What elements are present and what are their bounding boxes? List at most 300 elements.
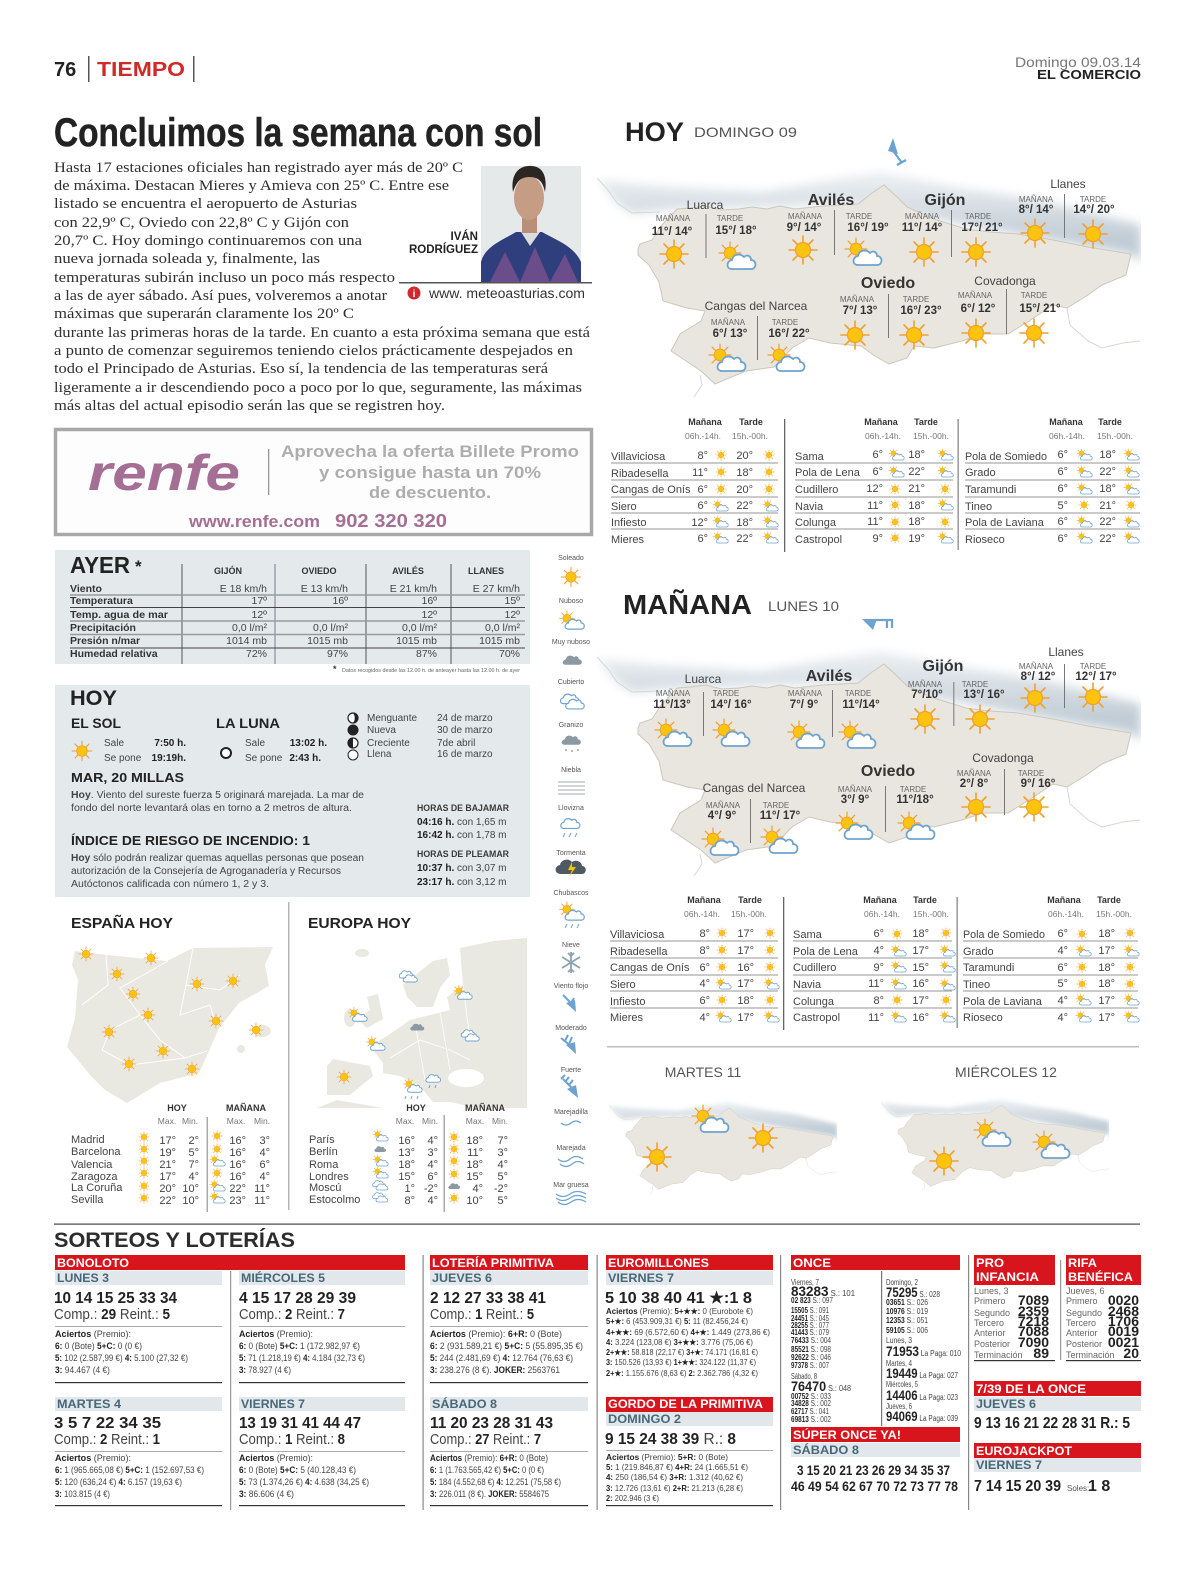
table: today forecast column 1: 6° bbox=[697, 484, 708, 496]
map: martes 11 bbox=[609, 1064, 837, 1195]
icon: wind arrow today bbox=[888, 138, 906, 165]
panel: ayer: 12º bbox=[421, 609, 437, 621]
table: today forecast column 3: 6° bbox=[1057, 483, 1068, 495]
draw: jueves 6: 2 12 27 33 38 41 bbox=[430, 1290, 546, 1307]
weather legend: Nieve bbox=[562, 942, 580, 949]
el sol bbox=[71, 716, 186, 764]
panel: ayer: 1015 mb bbox=[396, 635, 437, 647]
title: Concluimos la semana con sol bbox=[54, 111, 542, 155]
article text: a punto de comenzar seguiremos teniendo cielos prácticamente despejados en bbox=[54, 343, 574, 359]
footnote bbox=[333, 664, 520, 674]
forecast: oviedo: Oviedo bbox=[861, 763, 915, 780]
table: tomorrow forecast column 3: Pola de Laviana bbox=[963, 996, 1043, 1008]
draw: martes 4: Aciertos (Premio): bbox=[55, 1453, 131, 1463]
table: tomorrow forecast column 2: 17° bbox=[912, 995, 929, 1007]
table: tomorrow forecast column 1: 06h.-14h. bbox=[684, 909, 720, 919]
advert: renfe: Aprovecha la oferta Billete Promo bbox=[281, 442, 579, 461]
panel: ayer: E 13 km/h bbox=[301, 583, 348, 595]
panel: ayer: Presión n/mar bbox=[70, 635, 140, 647]
table: today forecast column 1 bbox=[611, 417, 778, 546]
once results, right column: 12353 S.: 051 bbox=[886, 1316, 928, 1325]
forecast: aviles: 9°/ 14° bbox=[787, 222, 822, 234]
weather legend: Viento flojo bbox=[554, 983, 588, 990]
panel: ayer: LLANES bbox=[468, 566, 504, 576]
moon phases: Menguante bbox=[367, 713, 417, 724]
forecast: cangas del narcea: Cangas del Narcea bbox=[705, 299, 808, 313]
table: tomorrow forecast column 1: 17° bbox=[737, 978, 754, 990]
page header: TIEMPO bbox=[97, 59, 185, 81]
panel: super once ya: 3 15 20 21 23 26 29 34 35 37 bbox=[797, 1462, 950, 1478]
table: tomorrow forecast column 3: Tineo bbox=[963, 979, 990, 991]
once results, left column: 41443 S.: 079 bbox=[791, 1328, 829, 1337]
table: tomorrow forecast column 1: 15h.-00h. bbox=[731, 909, 767, 919]
weather legend: Tormenta bbox=[556, 850, 586, 857]
panel: ayer: 87% bbox=[416, 648, 437, 660]
weather legend: Muy nuboso bbox=[552, 639, 590, 646]
panel: euromillones: 4+★★: 69 (6.572,60 €) 4+★: 1.449 (273,86 €) bbox=[606, 1328, 770, 1337]
once results, right column: 94069 La Paga: 039 bbox=[886, 1408, 958, 1424]
forecast: gijon: Gijón bbox=[923, 658, 963, 675]
once results, right column: 14406 La Paga: 023 bbox=[886, 1387, 958, 1403]
table: europe: 13° bbox=[398, 1147, 415, 1159]
heading: mañana lunes bbox=[623, 589, 839, 620]
table: spain: Zaragoza bbox=[71, 1171, 118, 1183]
table: today forecast column 3: Mañana bbox=[1049, 417, 1084, 427]
forecast: covadonga bbox=[957, 751, 1056, 821]
panel: bonoloto bbox=[54, 1255, 405, 1510]
table: spain: La Coruña bbox=[71, 1182, 123, 1194]
map: spain bbox=[67, 947, 273, 1103]
once results, left column: 85521 S.: 098 bbox=[791, 1345, 831, 1354]
table: today forecast column 2: 9° bbox=[872, 533, 883, 545]
draw: martes 4 bbox=[54, 1397, 222, 1506]
article text: listado se encuentra el aeropuerto de Asturias bbox=[54, 196, 357, 212]
table: tomorrow forecast column 2: 6° bbox=[873, 928, 884, 940]
draw: lunes 3: 5: 102 (2.587,99 €) 4: 5.100 (27,32 €) bbox=[55, 1353, 188, 1363]
weather legend bbox=[552, 555, 590, 1204]
draw: sabado 8: SÁBADO 8 bbox=[432, 1396, 497, 1411]
article text: de máxima. Destacan Mieres y Amieva con 25º C. Entre ese bbox=[54, 178, 449, 194]
article text: durante las primeras horas de la tarde. En cuanto a esta próxima semana que está bbox=[54, 325, 591, 341]
forecast: covadonga: Covadonga bbox=[974, 274, 1036, 288]
forecast: oviedo: MAÑANA bbox=[840, 295, 875, 304]
forecast: gijon: 17°/ 21° bbox=[961, 222, 1003, 234]
panel: ayer: 16º bbox=[332, 595, 348, 607]
table: europe: 18° bbox=[398, 1159, 415, 1171]
table: today forecast column 1: Ribadesella bbox=[611, 468, 669, 480]
panel: gordo de la primitiva: DOMINGO 2 bbox=[608, 1412, 681, 1426]
table: tomorrow forecast column 2: 4° bbox=[873, 945, 884, 957]
la luna: Se pone bbox=[245, 753, 283, 764]
author byline and photo: www. meteoasturias.com bbox=[428, 286, 585, 301]
panel: euromillones: 3: 150.526 (13,93 €) 1+★★: 324.122 (11,37 €) bbox=[606, 1358, 756, 1367]
panel: loteria primitiva: LOTERÍA PRIMITIVA bbox=[432, 1255, 554, 1270]
forecast: aviles: 11°/14° bbox=[842, 699, 880, 711]
panel: gordo de la primitiva bbox=[605, 1397, 773, 1506]
table: tomorrow forecast column 2: Colunga bbox=[793, 996, 835, 1008]
panel: gordo de la primitiva: 3: 12.726 (13,61 €) 2+R: 21.213 (6,28 €) bbox=[606, 1484, 743, 1493]
article text bbox=[54, 160, 591, 414]
panel: rifa benefica: 0020 bbox=[1108, 1292, 1139, 1308]
article text: máximas que superarán claramente los 20º C bbox=[54, 306, 354, 322]
footnote: Datos recogidos desde las 12.00 h. de anteayer hasta las 12.00 h. de ayer bbox=[342, 668, 520, 674]
table: tomorrow forecast column 2: 18° bbox=[912, 928, 929, 940]
el sol: EL SOL bbox=[71, 716, 121, 731]
panel: rifa benefica: 20 bbox=[1123, 1345, 1139, 1361]
draw: viernes 7: Comp.: 1 Reint.: 8 bbox=[239, 1431, 345, 1448]
moon phases bbox=[348, 713, 493, 760]
page header: EL COMERCIO bbox=[1037, 68, 1141, 82]
forecast: covadonga: Covadonga bbox=[972, 751, 1034, 765]
table: today forecast column 1: Villaviciosa bbox=[611, 451, 666, 463]
draw: martes 4: MARTES 4 bbox=[57, 1397, 121, 1411]
horas de marea: 04:16 h. con 1,65 m bbox=[417, 817, 507, 828]
panel: gordo de la primitiva: 2: 202.946 (3 €) bbox=[606, 1494, 659, 1503]
table: tomorrow forecast column 3: Taramundi bbox=[963, 962, 1014, 974]
table: today forecast column 2: 12° bbox=[866, 483, 883, 495]
el sol: Se pone bbox=[104, 753, 142, 764]
horas de marea: HORAS DE PLEAMAR bbox=[417, 849, 509, 859]
table: europe: Moscú bbox=[309, 1182, 341, 1194]
draw: jueves 6: 5: 244 (2.481,69 €) 4: 12.764 (76,63 €) bbox=[430, 1353, 573, 1363]
forecast: luarca: TARDE bbox=[717, 214, 743, 223]
table: today forecast column 1: Tarde bbox=[739, 417, 763, 427]
table: tomorrow forecast column 3: 15h.-00h. bbox=[1096, 909, 1132, 919]
table: europe: 10° bbox=[466, 1195, 483, 1207]
table: spain: 4° bbox=[188, 1171, 199, 1183]
table: tomorrow forecast column 2: 11° bbox=[868, 1012, 884, 1024]
horas de marea: 16:42 h. con 1,78 m bbox=[417, 830, 507, 841]
table: tomorrow forecast column 1: 16° bbox=[737, 962, 754, 974]
table: spain: 2° bbox=[188, 1135, 199, 1147]
table: today forecast column 1: Mieres bbox=[611, 534, 645, 546]
panel: once bbox=[791, 1255, 961, 1426]
forecast: luarca: 15°/ 18° bbox=[715, 225, 757, 237]
table: europe: 3° bbox=[427, 1147, 438, 1159]
table: spain: HOY bbox=[167, 1103, 187, 1113]
once results, right column: Martes, 4 bbox=[886, 1359, 912, 1368]
forecast: cangas del narcea: TARDE bbox=[763, 801, 789, 810]
weather legend: Niebla bbox=[561, 767, 581, 774]
indice de riesgo de incendio bbox=[71, 833, 364, 890]
article text: con 22,9º C, Oviedo con 22,8º C y Gijón con bbox=[54, 215, 350, 231]
draw: sabado 8 bbox=[430, 1396, 588, 1506]
draw: jueves 6: JUEVES 6 bbox=[432, 1271, 492, 1285]
panel: pro infancia: Lunes, 3 bbox=[974, 1286, 1009, 1296]
horas de marea: 10:37 h. con 3,07 m bbox=[417, 863, 507, 874]
panel: super once ya bbox=[791, 1427, 960, 1494]
panel: rifa benefica: Anterior bbox=[1066, 1328, 1098, 1338]
panel: ayer: 12º bbox=[251, 609, 267, 621]
panel: ayer: Temperatura bbox=[70, 595, 133, 607]
heading: hoy domingo bbox=[625, 117, 797, 147]
table: tomorrow forecast column 3: 06h.-14h. bbox=[1048, 909, 1084, 919]
once results, left column: 15505 S.: 091 bbox=[791, 1306, 829, 1315]
panel: loteria primitiva bbox=[430, 1255, 588, 1506]
table: europe: Min. bbox=[422, 1116, 438, 1126]
table: today forecast column 3: 22° bbox=[1099, 516, 1116, 528]
panel: ayer: E 27 km/h bbox=[473, 583, 520, 595]
table: today forecast column 3: 15h.-00h. bbox=[1097, 431, 1133, 441]
table: europe: 18° bbox=[466, 1159, 483, 1171]
table: tomorrow forecast column 2: Castropol bbox=[793, 1012, 840, 1024]
forecast: luarca: Luarca bbox=[687, 198, 724, 212]
table: today forecast column 1: 22° bbox=[736, 533, 753, 545]
panel: rifa benefica: 0021 bbox=[1108, 1334, 1139, 1350]
panel: pro infancia: 7088 bbox=[1018, 1323, 1049, 1339]
moon phases: 24 de marzo bbox=[437, 713, 493, 724]
advert: renfe: 902 320 320 bbox=[335, 511, 447, 531]
table: tomorrow forecast column 3: 17° bbox=[1098, 945, 1115, 957]
table: today forecast column 1: Cangas de Onís bbox=[611, 484, 691, 496]
table: europe: Roma bbox=[309, 1159, 339, 1171]
table: europe: Max. bbox=[466, 1116, 484, 1126]
draw: martes 4: 3: 103.815 (4 €) bbox=[55, 1489, 110, 1499]
table: today forecast column 1: 22° bbox=[736, 500, 753, 512]
forecast: luarca: 11°/ 14° bbox=[652, 226, 693, 238]
table: europe: MAÑANA bbox=[465, 1103, 505, 1113]
forecast: oviedo: 3°/ 9° bbox=[841, 794, 870, 806]
footnote: * bbox=[333, 664, 337, 674]
draw: lunes 3 bbox=[54, 1271, 222, 1383]
forecast: cangas del narcea: 6°/ 13° bbox=[713, 328, 748, 340]
table: today forecast column 3: 6° bbox=[1057, 449, 1068, 461]
panel: ayer bbox=[55, 550, 530, 664]
table: today forecast column 2: Navia bbox=[795, 501, 824, 513]
table: tomorrow forecast column 1: Tarde bbox=[738, 895, 762, 905]
table: today forecast column 3: 18° bbox=[1099, 449, 1116, 461]
table: today forecast column 1: 20° bbox=[736, 484, 753, 496]
forecast: oviedo: MAÑANA bbox=[838, 785, 873, 794]
table: today forecast column 2: Colunga bbox=[795, 517, 837, 529]
table: tomorrow forecast column 3: Tarde bbox=[1097, 895, 1121, 905]
moon phases: 30 de marzo bbox=[437, 725, 493, 736]
table: tomorrow forecast column 3: Grado bbox=[963, 946, 994, 958]
forecast: covadonga: TARDE bbox=[1021, 291, 1047, 300]
panel: 7/39 de la once: 7/39 DE LA ONCE bbox=[976, 1382, 1086, 1396]
panel: bonoloto: BONOLOTO bbox=[57, 1256, 129, 1270]
forecast: cangas del narcea: TARDE bbox=[772, 318, 798, 327]
panel: pro infancia: 7090 bbox=[1018, 1334, 1049, 1350]
draw: sabado 8: Aciertos (Premio): 6+R: 0 (Bote) bbox=[430, 1453, 548, 1463]
table: today forecast column 1: Infiesto bbox=[611, 517, 646, 529]
table: tomorrow forecast column 2: 11° bbox=[868, 978, 884, 990]
mar, 20 millas: MAR, 20 MILLAS bbox=[71, 770, 184, 785]
panel: ayer: 16º bbox=[421, 595, 437, 607]
table: europe: 4° bbox=[497, 1159, 508, 1171]
once results, left column: 28255 S.: 077 bbox=[791, 1321, 829, 1330]
table: today forecast column 3: Pola de Somiedo bbox=[965, 451, 1047, 463]
forecast: aviles bbox=[788, 668, 880, 748]
forecast: oviedo: 16°/ 23° bbox=[900, 305, 942, 317]
table: today forecast column 1: 12° bbox=[691, 517, 708, 529]
author byline and photo: RODRÍGUEZ bbox=[409, 243, 478, 256]
forecast: gijon: MAÑANA bbox=[908, 680, 943, 689]
weather legend: Soleado bbox=[558, 555, 584, 562]
panel: eurojackpot: 7 14 15 20 39 bbox=[974, 1478, 1061, 1495]
table: tomorrow forecast column 3: 4° bbox=[1057, 995, 1068, 1007]
once results, left column: 34828 S.: 002 bbox=[791, 1399, 831, 1408]
table: tomorrow forecast column 2: 8° bbox=[873, 995, 884, 1007]
panel: pro infancia: 89 bbox=[1033, 1345, 1049, 1361]
table: spain: 22° bbox=[229, 1183, 246, 1195]
panel: ayer: 15º bbox=[504, 595, 520, 607]
panel: rifa benefica: RIFA bbox=[1068, 1256, 1097, 1270]
forecast: luarca bbox=[652, 198, 757, 269]
table: europe: 8° bbox=[404, 1195, 415, 1207]
draw: miercoles 5: 4 15 17 28 29 39 bbox=[239, 1290, 356, 1307]
forecast: oviedo bbox=[840, 275, 942, 349]
table: today forecast column 2: Cudillero bbox=[795, 484, 838, 496]
forecast: covadonga: 6°/ 12° bbox=[961, 303, 996, 315]
panel: pro infancia: Posterior bbox=[974, 1339, 1010, 1349]
once results, left column: 62717 S.: 041 bbox=[791, 1407, 829, 1416]
draw: sabado 8: 6: 1 (1.763.565,42 €) 5+C: 0 (0 €) bbox=[430, 1465, 544, 1475]
panel: ayer: 17º bbox=[251, 595, 267, 607]
map: miercoles 12 bbox=[881, 1064, 1109, 1192]
table: tomorrow forecast column 3: 6° bbox=[1057, 962, 1068, 974]
table: europe: 7° bbox=[497, 1135, 508, 1147]
table: spain: 16° bbox=[229, 1147, 246, 1159]
panel: ayer: 0,0 l/m² bbox=[232, 622, 267, 634]
draw: miercoles 5: Comp.: 2 Reint.: 7 bbox=[239, 1306, 345, 1323]
indice de riesgo de incendio: Autóctonos calificada con número 1, 2 y 3. bbox=[71, 879, 269, 890]
table: today forecast column 3: 5° bbox=[1057, 500, 1068, 512]
map: miercoles 12: MIÉRCOLES 12 bbox=[955, 1064, 1057, 1080]
draw: lunes 3: 10 14 15 25 33 34 bbox=[54, 1290, 177, 1307]
panel: ayer: 12º bbox=[504, 609, 520, 621]
draw: jueves 6: 3: 238.276 (8 €). JOKER: 2563761 bbox=[430, 1365, 560, 1375]
panel: 7/39 de la once: JUEVES 6 bbox=[976, 1397, 1036, 1411]
table: today forecast column 3 bbox=[965, 417, 1140, 546]
panel: super once ya: SÁBADO 8 bbox=[793, 1442, 859, 1457]
table: tomorrow forecast column 3: Rioseco bbox=[963, 1012, 1003, 1024]
panel: europa hoy bbox=[308, 916, 527, 1212]
draw: viernes 7 bbox=[239, 1397, 405, 1506]
panel: ayer: 0,0 l/m² bbox=[402, 622, 437, 634]
horas de marea: 23:17 h. con 3,12 m bbox=[417, 877, 507, 888]
forecast: cangas del narcea bbox=[705, 299, 810, 371]
forecast: oviedo: TARDE bbox=[903, 295, 929, 304]
draw: viernes 7: 6: 0 (Bote) 5+C: 5 (40.128,43 €) bbox=[239, 1465, 356, 1475]
draw: lunes 3: 6: 0 (Bote) 5+C: 0 (0 €) bbox=[55, 1341, 142, 1351]
table: tomorrow forecast column 3: 5° bbox=[1057, 978, 1068, 990]
advert: renfe: renfe bbox=[88, 445, 240, 501]
table: tomorrow forecast column 1: 18° bbox=[737, 995, 754, 1007]
panel: rifa benefica: Tercero bbox=[1066, 1318, 1096, 1328]
panel: ayer: E 18 km/h bbox=[220, 583, 267, 595]
mar, 20 millas bbox=[71, 770, 364, 814]
table: spain: 21° bbox=[159, 1159, 176, 1171]
forecast: llanes bbox=[1019, 177, 1115, 248]
table: tomorrow forecast column 1: Siero bbox=[610, 979, 636, 991]
forecast: gijon: 11°/ 14° bbox=[902, 222, 943, 234]
forecast: gijon: 13°/ 16° bbox=[963, 689, 1005, 701]
table: today forecast column 2: 6° bbox=[872, 466, 883, 478]
article text: Hasta 17 estaciones oficiales han registrado ayer más de 20º C bbox=[54, 160, 463, 176]
el sol: 19:19h. bbox=[152, 753, 186, 764]
table: today forecast column 2: Pola de Lena bbox=[795, 467, 861, 479]
mar, 20 millas: fondo del norte levantará olas en torno a 2 metros de altura. bbox=[71, 803, 352, 814]
panel: europa hoy: EUROPA HOY bbox=[308, 916, 411, 932]
article text: a las de ayer sábado. Así pues, volveremos a anotar bbox=[54, 288, 387, 304]
weather legend: Granizo bbox=[559, 722, 583, 729]
draw: viernes 7: 5: 73 (1.374,26 €) 4: 4.638 (34,25 €) bbox=[239, 1477, 369, 1487]
panel: ayer: 0,0 l/m² bbox=[485, 622, 520, 634]
forecast: covadonga: 9°/ 16° bbox=[1021, 778, 1056, 790]
moon phases: 7de abril bbox=[437, 738, 475, 749]
table: spain: 16° bbox=[229, 1171, 246, 1183]
once results, right column: Domingo, 2 bbox=[886, 1278, 918, 1287]
forecast: gijon: 7°/10° bbox=[911, 689, 943, 701]
moon phases: Creciente bbox=[367, 738, 410, 749]
forecast: cangas del narcea: Cangas del Narcea bbox=[703, 781, 806, 795]
forecast: gijon: MAÑANA bbox=[905, 212, 940, 221]
article text: ligeramente a ir descendiendo poco a poco por lo que, seguramente, las máximas bbox=[54, 380, 582, 396]
weather legend: Mar gruesa bbox=[553, 1182, 589, 1189]
draw: miercoles 5: MIÉRCOLES 5 bbox=[241, 1270, 325, 1285]
heading: hoy domingo: HOY bbox=[625, 117, 684, 147]
draw: jueves 6: 6: 2 (931.589,21 €) 5+C: 5 (55.895,35 €) bbox=[430, 1341, 583, 1351]
table: today forecast column 2: 18° bbox=[908, 500, 925, 512]
table: tomorrow forecast column 3: 6° bbox=[1057, 928, 1068, 940]
table: tomorrow forecast column 3: Pola de Somiedo bbox=[963, 929, 1045, 941]
table: europe: 4° bbox=[427, 1159, 438, 1171]
table: spain: 23° bbox=[229, 1195, 246, 1207]
table: spain: 5° bbox=[188, 1147, 199, 1159]
panel: euromillones: 5+★: 6 (453.909,31 €) 5: 11 (82.456,24 €) bbox=[606, 1317, 748, 1326]
table: tomorrow forecast column 1: 8° bbox=[699, 928, 710, 940]
panel: euromillones: 2+★: 1.155.676 (8,63 €) 2: 2.362.786 (4,32 €) bbox=[606, 1369, 758, 1378]
table: spain: 10° bbox=[182, 1195, 199, 1207]
panel: euromillones: VIERNES 7 bbox=[608, 1271, 674, 1285]
once results, right column: 75295 S.: 028 bbox=[886, 1284, 940, 1300]
table: today forecast column 2: 21° bbox=[908, 483, 925, 495]
forecast: gijon: TARDE bbox=[962, 680, 988, 689]
table: tomorrow forecast column 3 bbox=[963, 895, 1139, 1024]
once results, left column: 02 823 S.: 097 bbox=[791, 1296, 833, 1305]
table: today forecast column 3: 18° bbox=[1099, 483, 1116, 495]
table: tomorrow forecast column 1: 17° bbox=[737, 928, 754, 940]
heading: hoy domingo: DOMINGO 09 bbox=[694, 124, 797, 140]
table: tomorrow forecast column 2: Navia bbox=[793, 979, 822, 991]
table: tomorrow forecast column 3: 17° bbox=[1098, 1012, 1115, 1024]
forecast: aviles: Avilés bbox=[808, 192, 854, 209]
table: today forecast column 2: 11° bbox=[867, 500, 883, 512]
table: europe: 6° bbox=[427, 1171, 438, 1183]
table: tomorrow forecast column 1: Ribadesella bbox=[610, 946, 668, 958]
table: spain: Min. bbox=[254, 1116, 270, 1126]
article text: más altas del actual episodio serán las que se registren hoy. bbox=[54, 398, 445, 414]
indice de riesgo de incendio: autorización de la Consejería de Agroganadería y Recursos bbox=[71, 866, 341, 877]
table: europe: 5° bbox=[497, 1195, 508, 1207]
table: europe bbox=[309, 1103, 508, 1212]
panel: pro infancia: 7218 bbox=[1018, 1313, 1049, 1329]
table: spain: 22° bbox=[159, 1195, 176, 1207]
panel: gordo de la primitiva: GORDO DE LA PRIMITIVA bbox=[608, 1397, 763, 1411]
panel: pro infancia bbox=[974, 1255, 1055, 1361]
table: today forecast column 2: 11° bbox=[867, 516, 883, 528]
panel: eurojackpot: VIERNES 7 bbox=[976, 1458, 1042, 1472]
table: spain: Sevilla bbox=[71, 1194, 104, 1206]
indice de riesgo de incendio: Hoy sólo podrán realizar quemas aquellas personas que posean bbox=[71, 853, 364, 864]
table: today forecast column 3: Tarde bbox=[1098, 417, 1122, 427]
draw: jueves 6: Comp.: 1 Reint.: 5 bbox=[430, 1306, 534, 1323]
forecast: aviles: 16°/ 19° bbox=[847, 222, 889, 234]
table: tomorrow forecast column 2: 15° bbox=[912, 962, 929, 974]
panel: gordo de la primitiva: Aciertos (Premio): 5+R: 0 (Bote) bbox=[606, 1453, 728, 1462]
draw: lunes 3: LUNES 3 bbox=[57, 1271, 109, 1285]
